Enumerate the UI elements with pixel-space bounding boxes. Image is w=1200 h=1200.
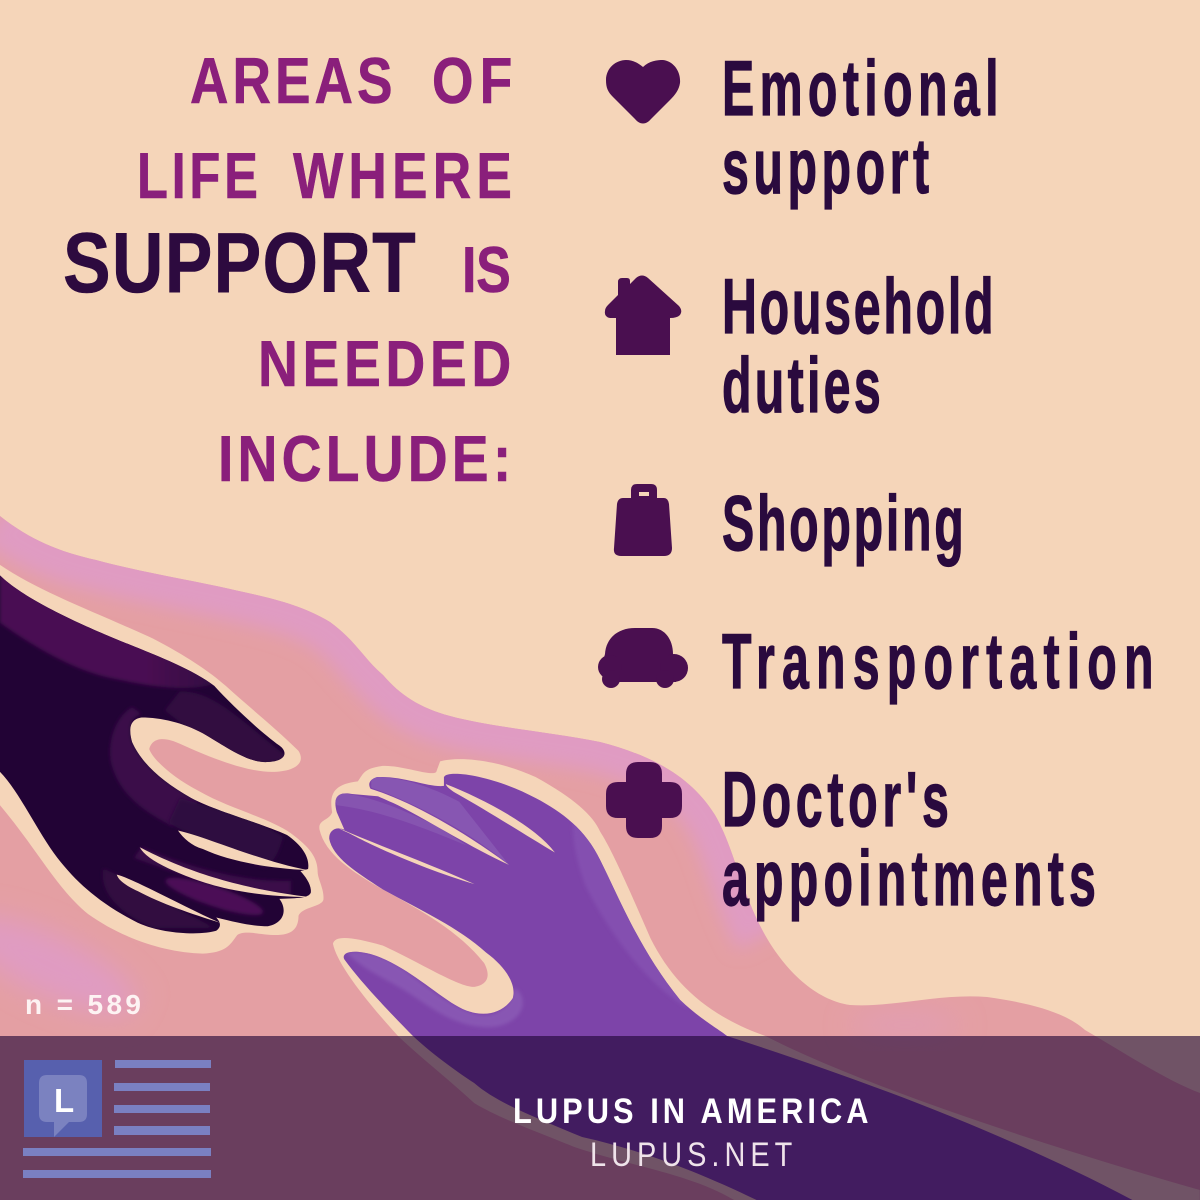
icon: house xyxy=(605,276,681,355)
dark hand finger gaps xyxy=(117,830,310,923)
item: transportation: Transportation xyxy=(722,617,1154,705)
dark hand silhouette xyxy=(0,576,311,934)
icon: shopping bag xyxy=(614,484,672,556)
purple wrist highlight xyxy=(573,816,689,1009)
banner overlay xyxy=(0,1036,1200,1200)
sample size note: n = 589 xyxy=(25,989,141,1020)
dark hand cream outline xyxy=(0,565,324,954)
heading word: is: IS xyxy=(462,235,511,306)
item: emotional support xyxy=(722,44,999,210)
purple thumb highlight xyxy=(346,952,523,1027)
banner title: LUPUS IN AMERICA xyxy=(513,1091,869,1130)
heading line: include: INCLUDE: xyxy=(218,422,511,495)
logo speech bubble xyxy=(39,1075,87,1137)
label line: household: Household xyxy=(722,262,994,350)
logo xyxy=(23,1060,211,1178)
dark upper finger tone xyxy=(168,798,283,868)
purple finger highlight xyxy=(371,777,509,865)
label line: appointments: appointments xyxy=(722,834,1096,922)
purple hand reaching from the lower right xyxy=(306,746,1200,1200)
heading word: support: SUPPORT xyxy=(63,215,416,310)
icon: heart xyxy=(606,60,680,124)
dark hand crotch glow xyxy=(110,707,199,826)
dark hand reaching from the left xyxy=(0,553,344,956)
dark little finger tone xyxy=(103,868,214,928)
heading word: of: OF xyxy=(432,44,512,117)
purple hand silhouette xyxy=(329,774,1132,1200)
item: doctor's appointments xyxy=(722,755,1096,922)
label line: emotional: Emotional xyxy=(722,44,999,132)
dark lower finger glow xyxy=(164,876,264,916)
purple second finger highlight xyxy=(333,793,467,846)
label line: doctor's: Doctor's xyxy=(722,755,949,843)
heading line: needed: NEEDED xyxy=(258,327,511,400)
heading word: where: WHERE xyxy=(293,139,512,212)
logo text lines xyxy=(23,1060,211,1178)
item: household duties xyxy=(722,262,994,429)
icon: medical cross xyxy=(606,762,682,838)
logo square xyxy=(24,1060,102,1137)
pink wave background xyxy=(0,500,1200,1200)
heading word: life: LIFE xyxy=(137,140,258,212)
banner url: LUPUS.NET xyxy=(590,1135,792,1174)
label line: duties: duties xyxy=(722,341,881,429)
heading xyxy=(63,44,512,495)
purple hand cream outline xyxy=(319,759,1200,1200)
dark middle finger tone xyxy=(134,847,291,895)
item: shopping: Shopping xyxy=(722,479,964,567)
dark hand wrist highlight xyxy=(0,570,218,688)
heading word: areas: AREAS xyxy=(190,44,393,117)
dark thumb tone xyxy=(166,692,284,762)
icon: car xyxy=(598,628,688,688)
label line: support: support xyxy=(722,122,929,210)
purple hand finger gaps xyxy=(339,784,555,884)
logo letter: L xyxy=(54,1082,74,1119)
